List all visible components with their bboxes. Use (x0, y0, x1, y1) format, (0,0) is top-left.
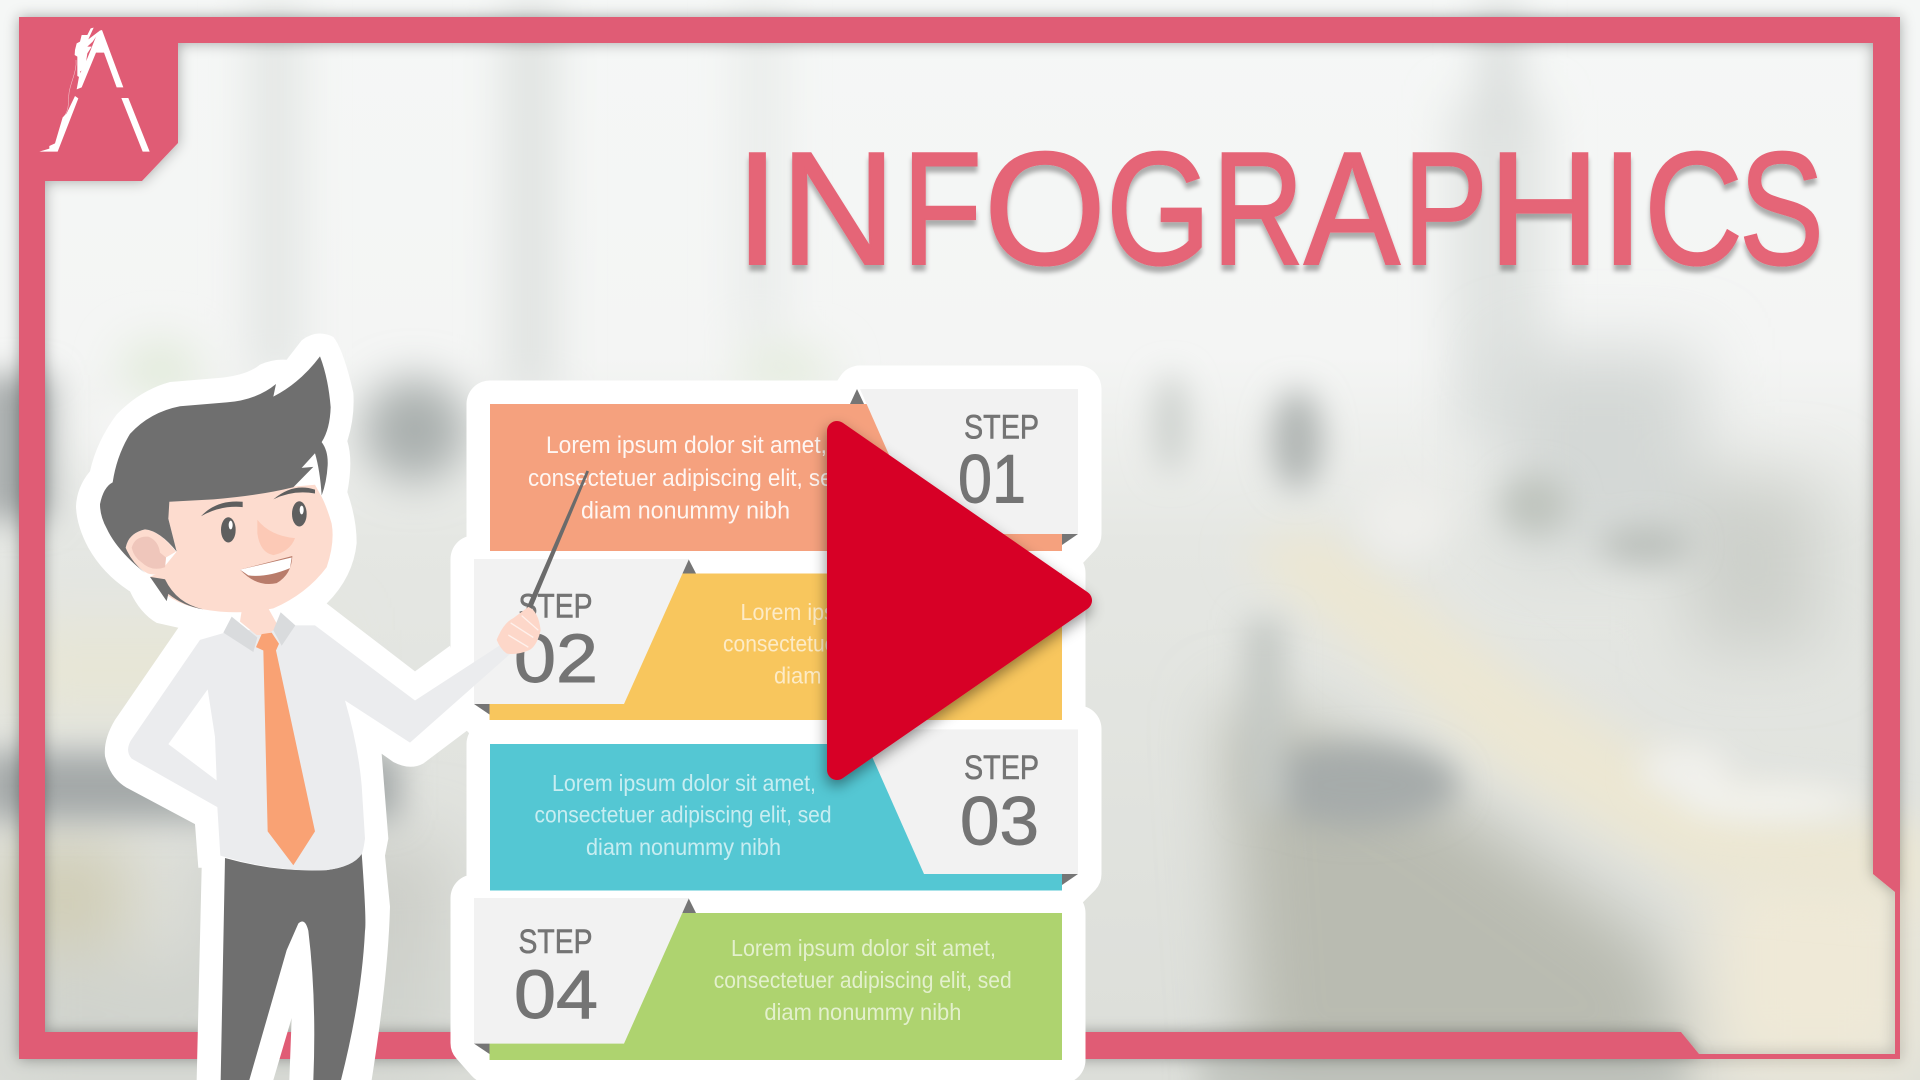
panel: step 02: STEP (518, 588, 592, 626)
panel: step 01 (490, 389, 1078, 551)
title: C (1644, 119, 1743, 299)
panel: step 03: 03 (960, 782, 1039, 859)
panel: step 02: 02 (514, 620, 598, 697)
panel: step 04: STEP (518, 923, 592, 961)
title: R (1212, 119, 1304, 299)
title: H (1488, 119, 1600, 299)
shirt collar (223, 612, 295, 652)
hair (100, 356, 331, 573)
panel: step 04: 04 (514, 956, 598, 1033)
nose (257, 520, 295, 555)
panel: step 01: Lorem ipsum dolor sit amet, (546, 432, 827, 459)
sticker outline: step panels (474, 389, 1078, 1060)
panel: step 03: consectetuer adipiscing elit, sed (534, 802, 832, 828)
title: G (1106, 119, 1211, 299)
panel: step 03: diam nonummy nibh (586, 834, 781, 860)
smile (240, 556, 292, 584)
title: A (1304, 119, 1401, 299)
title: I (1600, 119, 1645, 299)
panel: step 02: Lorem ipsum dolor sit amet, (740, 599, 1006, 625)
arm gap (168, 689, 217, 780)
neck (240, 608, 278, 635)
panel: step 01: diam nonummy nibh (581, 498, 790, 524)
title: I (735, 119, 780, 299)
character: presenter (100, 356, 541, 1080)
play button (837, 431, 1082, 770)
necktie (256, 633, 315, 865)
ear (126, 529, 176, 574)
panel: step 04: consectetuer adipiscing elit, sed (714, 967, 1012, 993)
title: S (1739, 119, 1824, 299)
title: O (984, 119, 1106, 299)
panel: step 04: diam nonummy nibh (764, 999, 961, 1025)
hair at nape (150, 577, 203, 609)
eyebrows (201, 487, 315, 516)
title: N (780, 119, 896, 299)
shirt and arms (128, 625, 511, 870)
sticker outline: presenter (76, 334, 468, 1080)
title: P (1403, 119, 1488, 299)
trousers (221, 853, 365, 1080)
panel: step 03: STEP (964, 749, 1039, 787)
panel: step 01: 01 (958, 441, 1026, 518)
panel: step 03 (490, 729, 1078, 890)
panel: step 01: STEP (964, 408, 1039, 446)
face (150, 485, 333, 612)
pointer stick (519, 470, 589, 625)
title (735, 119, 1824, 299)
eyes (221, 501, 307, 542)
panel: step 02 (474, 559, 1062, 720)
icon: climber logo (39, 28, 150, 152)
title: F (902, 119, 982, 299)
hand (497, 607, 541, 654)
panel: step 02: consectetuer adipiscing elit, sed (723, 631, 1021, 657)
panel: step 04: Lorem ipsum dolor sit amet, (731, 935, 996, 961)
panel: step 03: Lorem ipsum dolor sit amet, (552, 770, 816, 796)
panel: step 01: consectetuer adipiscing elit, sed (528, 465, 845, 492)
panel: step 02: diam nonummy nibh (774, 662, 971, 688)
panel: step 04 (474, 898, 1062, 1060)
